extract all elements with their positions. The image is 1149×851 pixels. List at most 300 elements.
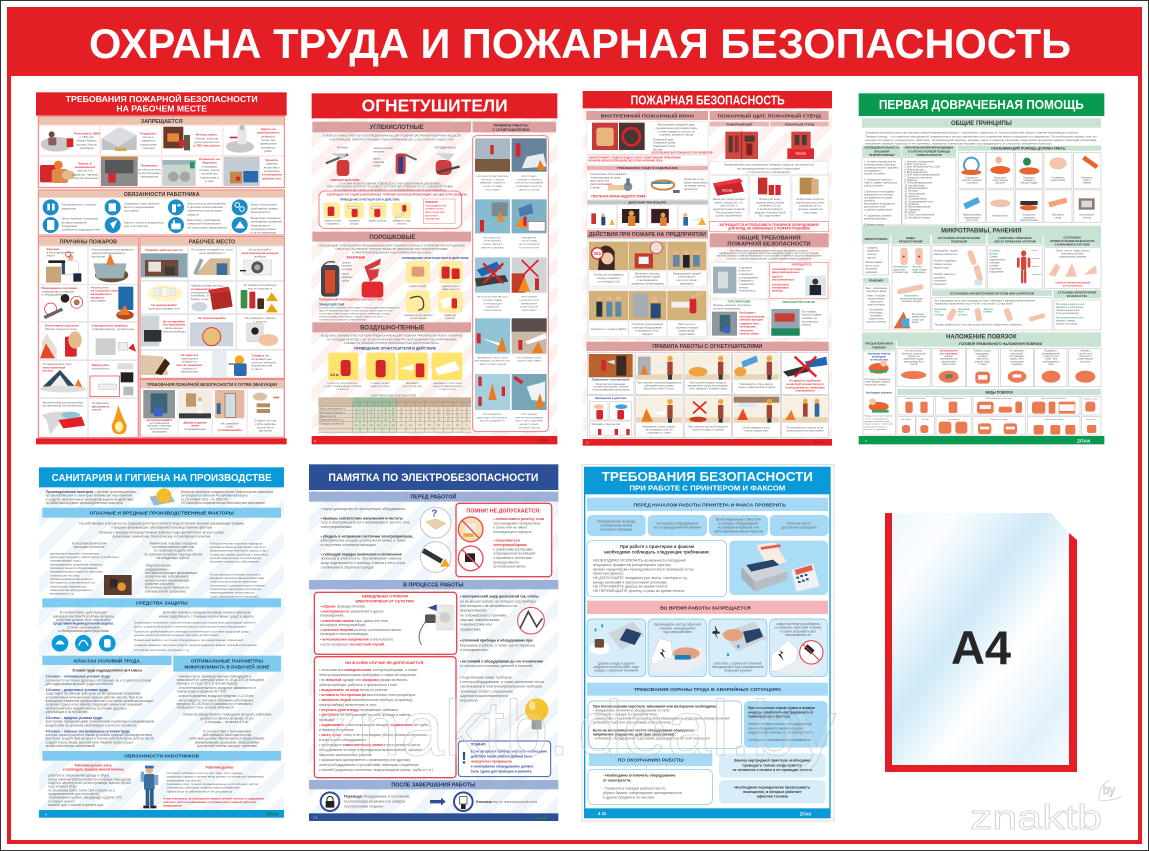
panel: employee duties: Ознакомиться с планом <box>62 203 96 207</box>
section: applying bandages: На стопу <box>1087 419 1096 421</box>
section: check before start: достаточно освещено <box>781 525 817 529</box>
section: general principles: показания к <box>1023 217 1036 219</box>
section: hazardous factors: канцерогенные (вызывающие <box>145 578 189 582</box>
section: general principles: 20. Пинцет <box>904 211 917 214</box>
section: employee duties: принимать пищу только в предназначенных для этой цели местах, <box>167 782 259 786</box>
section: general requirements: ЗАПРЕЩАЕТСЯ: <box>791 264 812 267</box>
section: extinguisher working rules: обморожения <box>795 389 815 393</box>
section: microtraumas and wounds: СГИБАНИЕМ В СУСТАВЕ <box>1055 242 1090 246</box>
section: actions during a fire at the enterprise: охрану и вызвать <box>597 276 621 280</box>
section: hazardous factors: раздражающие; <box>145 567 169 571</box>
panel: workplace: помещении <box>181 356 198 360</box>
warning box: under no circumstances <box>314 657 456 778</box>
section: general principles: Основным условием успеха при оказании первой медицинской помощи – спокойствие, правильность, быстрота действий, знания и умение оказывающего помощь. <box>865 131 1079 135</box>
section: actions during a fire at the enterprise: пожарную сигнализацию <box>631 281 665 285</box>
section: general requirements: загромождать проходы и <box>772 268 804 271</box>
notice box: do not extinguish without oxygen: тушении нельзя <box>425 208 444 211</box>
section: fire board and stand: должна иметь объем <box>756 200 784 204</box>
section: check before start: Вентиляционные отверстия <box>716 517 761 521</box>
section: fire board and stand: Ящик для песка должен <box>713 197 745 201</box>
poster 1 header: НА РАБОЧЕМ МЕСТЕ <box>116 105 208 114</box>
panel: prohibited: Пользовать ЭВМ <box>74 131 100 135</box>
section: general principles: 5. Вата медицинская <box>904 171 928 174</box>
section: powder extinguishers: ПРИНЦИП ДЕЙСТВИЯ <box>319 304 345 307</box>
panel: evacuation routes: легко <box>191 424 199 428</box>
section: general principles: тяжесть травмы, наибольшую <box>864 181 897 184</box>
panel: causes of fires: и оборудования <box>41 293 64 297</box>
section: microtraumas and wounds: Необходимо: поднять <box>934 250 959 253</box>
section: powder extinguishers: нажать на <box>445 315 456 317</box>
table: extinguisher characteristics: 4 <box>438 416 440 418</box>
section: general principles: Определить <box>1022 215 1036 217</box>
section: internal fire hydrant: Внутренний пожарный кран <box>658 123 695 127</box>
panel: evacuation routes: Держите двери <box>183 420 207 424</box>
section: internal fire hydrant: ВОСПОЛЬЗОВАТЬСЯ ЛЮБЫМ ИЗ ЭТИХ ЭЛЕМЕНТОВ <box>651 151 713 154</box>
section: powder extinguishers: ПОЖАРОВ ТВЕРДЫХ МАТЕРИАЛОВ, ГОРЮЧИХ ЖИДКОСТЕЙ, ГАЗОВ <box>319 316 384 319</box>
section: optimal microclimate parameters: пределах 35-100 Вт/м2 в зависимости от величины <box>177 702 253 706</box>
section: work condition classes: установленных гигиенических норм на рабочих местах. При этом <box>46 695 143 699</box>
table: extinguisher characteristics: 5,0 <box>437 409 441 411</box>
poster: electrical safety memo <box>309 464 558 821</box>
section: general principles: 8. Ножницы <box>904 179 918 182</box>
poster 6 footer <box>309 813 558 821</box>
section: general principles: Проводить <box>1023 177 1036 179</box>
section: applying bandages: предметы <box>1012 364 1023 366</box>
section: hazardous factors: материалов и т.д. <box>50 592 75 596</box>
section: general principles: 1. Устранить воздействие на <box>864 160 896 163</box>
section: hazardous factors: повышенная температура <box>50 584 87 588</box>
warning box: disconnect immediately: • появлении запаха гари, дыма или огня <box>320 619 388 623</box>
section: employee duties: предприятия <box>163 804 182 808</box>
section: applying bandages: должна не сдавливать <box>865 429 888 431</box>
section: prohibited during work: мокрыми руками <box>724 669 752 673</box>
section: general principles: 21. Пакет гипотермический <box>904 214 935 217</box>
section: employee duties: в стирку и ремонт; <box>48 799 76 803</box>
panel: employee duties: Курить только в отведенных <box>124 220 164 224</box>
section: general principles: 3. Выполнить необходимые <box>864 190 895 193</box>
section: applying bandages: Спиральная повязка <box>905 398 926 400</box>
section: general principles: Иммобилизовать <box>963 215 982 217</box>
section: work condition classes <box>42 656 172 748</box>
section: during work: от электросети съемных деталей и панелей; <box>460 664 533 668</box>
section: applying bandages: к ране. При <box>1045 359 1058 361</box>
table: extinguisher characteristics: Площадь тушения, м2 <box>320 423 345 425</box>
section: carbon dioxide extinguishers: ПЕРЕДВИЖНЫЕ <box>434 145 456 149</box>
section: microtraumas and wounds: кровь темная, <box>913 269 928 271</box>
section: check before start: На корпусе оборудования <box>656 521 698 525</box>
section: air-foam extinguishers: СОРВАТЬ ПЛОМБУ <box>370 382 391 385</box>
section: applying bandages: необходимо <box>872 356 887 358</box>
panel: workplace: и света <box>252 367 262 371</box>
panel: prohibited <box>38 117 284 188</box>
section: microtraumas and wounds: сохранить <box>934 276 946 279</box>
section: microtraumas and wounds: холод на переносицу <box>1056 313 1080 315</box>
icon: lock <box>321 792 339 811</box>
section: carbon dioxide extinguishers: И МАТЕРИАЛОВ, ЭЛЕКТРОУСТАНОВОК ПОД НАПРЯЖЕНИЕМ ДО 10 КВ, ГОРЮЧИХ ЖИДКОСТЕЙ. <box>329 138 454 142</box>
panel: causes of fires: электрооборудования и <box>92 251 126 255</box>
panel: workplace: у розеток <box>253 319 267 323</box>
section: general principles: 7. Салфетки стерильные <box>904 176 933 179</box>
panel: evacuation routes: устанавливайте <box>218 428 242 432</box>
section: microtraumas and wounds: ОСТАНОВКА КРОВОТЕЧЕНИЯ <box>938 236 980 240</box>
section: extinguisher working rules: Направить струю на очаг <box>591 423 620 426</box>
section: protective equipment: СРЕДСТВА ЗАЩИТЫ <box>136 601 188 607</box>
section: microtraumas and wounds: сонная <box>1031 250 1038 252</box>
panel: extinguisher operating rules: ОТТЕРЕЗАЮЩИЙ <box>483 302 502 305</box>
section: hazardous factors: перенапряжение, монотонность <box>210 591 255 595</box>
section: employee duties: по окончании работ снять СИЗ и убрать их в <box>48 788 115 792</box>
section: protective equipment: В соответствии с действующим <box>60 611 107 615</box>
section: emergency requirements: очередь освободить пострадавшего от <box>748 710 814 714</box>
poster 5 footer: 4 <box>45 812 47 816</box>
section: hazardous factors: микроорганизмы (бактерии, вирусы и др.) <box>210 549 268 553</box>
panel: extinguisher operating rules: НЕ ПРИВОДИТЕ В <box>483 414 502 416</box>
section: microtraumas and wounds: инфекции <box>865 270 878 274</box>
section: work condition classes: которые характеризуются такими уровнями вредных производственных <box>46 733 153 737</box>
panel: extinguisher operating rules: ПРИ ПОЖАРЕ <box>485 188 500 191</box>
section: microtraumas and wounds: покровных тканей <box>867 290 887 293</box>
warning box: disconnect immediately <box>314 592 457 654</box>
table: extinguisher characteristics: 5 <box>447 416 449 418</box>
section: after finishing work: ПО ОКОНЧАНИЮ РАБОТЫ <box>618 758 684 764</box>
panel: employee duties: Выполнять требования <box>187 218 221 222</box>
section: powder extinguishers: сифонная <box>342 276 353 279</box>
section: microtraumas and wounds: опасны для <box>870 302 883 304</box>
table: extinguisher characteristics: 15 <box>437 420 441 422</box>
poster 4 header <box>859 93 1104 116</box>
panel: workplace: Не курите в <box>181 353 198 357</box>
section: employee duties: рабочего места в надлежащем состоянии несет каждый работник <box>163 800 256 804</box>
section: after finishing work: от электросети; <box>603 778 631 782</box>
section: emergency requirements: Оказать первую помощь пострадавшему, <box>748 722 812 726</box>
section: microtraumas and wounds: Венозное <box>913 267 923 269</box>
section: general principles: дыхание и <box>1023 180 1035 182</box>
poster 2 footer: 6 <box>314 439 316 443</box>
table: extinguisher characteristics: ХАРАКТЕРИСТИКИ ОГНЕТУШИТЕЛЕЙ <box>371 395 416 398</box>
section: microtraumas and wounds: Признаки правильности: отсутствие пульса ниже жгута, кровотечение остановлено <box>935 325 1022 327</box>
panel: evacuation routes: открываемыми <box>184 427 206 431</box>
section: actions during a fire at the enterprise: Сообщить о пожаре (МЧС) <box>591 327 627 331</box>
section: microtraumas and wounds: наклонить голову вперед, <box>1056 307 1084 309</box>
poster 4 footer <box>859 436 1104 444</box>
section: applying bandages: повязку, <box>944 356 953 358</box>
section: check before start <box>587 498 829 536</box>
section: applying bandages: сдавливая сосуды, <box>903 359 924 361</box>
section: during work: Администрации/инженерного <box>460 694 508 698</box>
section: extinguisher working rules: Огнетушитель применяют <box>596 383 627 386</box>
section: prohibited during work: производить чистку офисной <box>654 623 701 627</box>
section: general principles: находится рядом и предпринять действия. Оказывающий помощь должен знать основные признаки нарушения жизненно важных функций организма, <box>865 138 1097 142</box>
panel: causes of fires: костер <box>43 369 53 373</box>
info box: attention: и неисправное оборудование должно <box>471 764 533 768</box>
panel: evacuation routes: Не снимайте <box>221 421 239 425</box>
section: internal fire hydrant: Пожарный ствол <box>653 144 675 148</box>
panel: prohibited: территории и <box>200 175 219 179</box>
section: during work: сырыми, заземленными <box>460 618 499 622</box>
warning box: under no circumstances: • производить самостоятельно ремонт электрической части <box>319 743 420 747</box>
section: microtraumas and wounds: равномерно <box>913 272 926 274</box>
section: work condition classes: работающих и их потомство <box>46 710 88 714</box>
section: powder extinguishers: направить струю порошка <box>404 315 433 317</box>
section: general principles: восстановить проходимость <box>864 202 896 205</box>
section: general principles: 12. Валидол <box>904 190 919 193</box>
section: general principles: 6. Жгут кровоостанавливающий <box>904 174 940 177</box>
section: general principles: 11. Раствор аммиака <box>904 187 928 190</box>
warning box: under no circumstances: • пользоваться самодельными электроприборами, а также <box>319 668 417 672</box>
section: during work: • подключение новых приборов <box>460 675 512 679</box>
section: before work: шнур подключается к прибору, а затем к сети, а при <box>321 561 405 565</box>
panel: workplace <box>140 237 284 378</box>
table: extinguisher characteristics: 2 <box>356 416 358 418</box>
section: general principles: пострадавшего; <box>864 169 882 172</box>
section: actions during a fire at the enterprise <box>587 230 708 339</box>
poster: first aid <box>859 93 1104 444</box>
panel: causes of fires: свечей <box>92 408 102 412</box>
section: general requirements: использовать <box>772 283 790 286</box>
panel: extinguisher operating rules: НЕ ПОДНОСИТЬ <box>484 237 502 239</box>
poster: fire extinguishers <box>312 93 557 444</box>
poster 1 header <box>36 92 287 116</box>
section: hazardous factors: психические перегрузки (умственное <box>210 587 262 591</box>
section: actions during a fire at the enterprise: место по плану <box>676 278 697 282</box>
warning box: under no circumstances: • заполнять водой нагревательные приборы (к примеру <box>319 698 412 702</box>
section: microtraumas and wounds: сильная струя <box>893 272 909 274</box>
section: fire board and stand: Предназначены для размещения пожарных средств, инструментов, <box>724 163 814 167</box>
panel: causes of fires: приборов <box>92 254 106 258</box>
section: microtraumas and wounds: Раны с большим <box>867 296 886 298</box>
section: optimal microclimate parameters: а площадь – не менее 4,5 м2 <box>205 720 249 724</box>
poster 5 header <box>39 467 284 487</box>
panel: extinguisher operating rules: ЗАГОРЕВШЕЙСЯ ПОВЕРХНОСТИ, <box>474 360 511 363</box>
table: extinguisher characteristics: 20 <box>370 420 373 422</box>
section: during work: или аппараты, не натягивался и не <box>460 604 517 608</box>
panel: prohibited: территорию <box>140 142 157 146</box>
poster 4 footer: ZПАК <box>1077 438 1091 444</box>
panel: extinguisher operating rules: ТУШИТЕ СНИЗУ ВВЕРХ <box>517 361 542 363</box>
warning box: disconnect immediately: • если произошел несчастный случай. <box>320 642 385 646</box>
section: applying bandages: чистой <box>910 363 918 366</box>
section: microtraumas and wounds: Закрутка <box>984 309 994 311</box>
section: general requirements: ПОЖАРНОЙ БЕЗОПАСНОСТИ <box>727 239 811 247</box>
section: extinguisher working rules: и использованием огнетушителя <box>592 388 630 391</box>
section: after work: исключающее возможность запуска <box>344 800 406 804</box>
panel: extinguisher operating rules: ПРИ ТУШЕНИИ <box>521 297 537 299</box>
section: hazardous factors: развитие опухолей); <box>145 582 175 586</box>
section: applying bandages: водой, снять <box>1010 358 1025 361</box>
warning box: remember not allowed: провода вместо <box>493 560 519 564</box>
panel: prohibited: на обогрев печи <box>138 167 161 171</box>
warning box: under no circumstances: • опускать руки в воду нагреваемую чайником; <box>319 708 399 712</box>
section: extinguisher working rules: Применение огнетушителей <box>592 378 630 382</box>
poster 7 footer: ZПАК <box>800 811 812 816</box>
section: general requirements: Содержать <box>739 265 753 269</box>
section: actions during a fire at the enterprise: тушению пожара <box>675 325 698 329</box>
section: microtraumas and wounds: положение <box>934 280 947 283</box>
table: extinguisher characteristics: 8,5 <box>437 412 441 414</box>
section: fire board and stand: иметь объем 0,5; 1,0 <box>715 200 743 204</box>
section: hazardous factors: физические, химические, биологические и психофизиологические <box>113 534 211 538</box>
table: extinguisher characteristics: 10 <box>465 409 469 411</box>
section: applying bandages: На лоб <box>922 419 930 421</box>
section: prohibited during work: неисправные ее <box>785 633 811 637</box>
table: extinguisher characteristics: 10 <box>419 420 422 422</box>
section: hazardous factors: передвигающиеся изделия, заготовки; <box>50 570 103 574</box>
section: actions during a fire at the enterprise: Эвакуировать людей <box>673 271 701 275</box>
section: hazardous factors: производственным факторам относятся <box>210 545 266 549</box>
section: general requirements: и оборудование <box>739 275 759 279</box>
section: microtraumas and wounds: КРОВОТЕЧЕНИЙ <box>899 240 922 244</box>
section: prohibited during work: и собирать офисную технику <box>775 626 822 630</box>
poster 3 header: ПОЖАРНАЯ БЕЗОПАСНОСТЬ <box>631 93 785 107</box>
panel: workplace: контейнер, а <box>191 294 209 298</box>
section: microtraumas and wounds: МИКРОТРАВМЫ, РАНЕНИЯ <box>941 228 1022 234</box>
section: general principles: 9. Перчатки медицинские <box>904 182 933 185</box>
section: microtraumas and wounds: Наложение <box>958 309 971 311</box>
requirements box: инородных предметов (канцелярских скрепок, <box>593 563 671 567</box>
section: applying bandages: накладывать <box>975 353 990 355</box>
section: carbon dioxide extinguishers: механизм <box>373 152 384 154</box>
panel: extinguisher operating rules: ОБЕСТОЧИТЬ И ДЕРЖАТЬ <box>515 420 544 423</box>
section: applying bandages: Повязка на голову <box>1044 419 1064 421</box>
poster: sanitation and hygiene at work <box>39 467 284 818</box>
section: actions during a fire at the enterprise: средствами <box>679 332 695 336</box>
panel: causes of fires: брошенных <box>92 404 110 408</box>
section: general principles: оказания первой помощи и ее приемы, правила транспортировки пострадавшего и способы оказания помощи. <box>865 142 1052 146</box>
section: actions during a fire at the enterprise: эвакуации <box>680 281 694 285</box>
section: hazardous factors: ОПАСНЫЕ И ВРЕДНЫЕ ПРОИЗВОДСТВЕННЫЕ ФАКТОРЫ <box>90 511 234 517</box>
panel: causes of fires: Самодельные приборы <box>92 324 128 328</box>
table: extinguisher characteristics: 2 <box>466 425 468 427</box>
warning box: remember not allowed: • пользоваться <box>493 539 520 543</box>
section: applying bandages: загрязненные <box>941 361 957 363</box>
section: extinguisher working rules: огнетушителя во избежание <box>785 385 825 389</box>
section: fire board and stand: ПЕСОК <box>722 189 733 193</box>
carbon dioxide extinguisher drawings <box>325 153 460 176</box>
section: after finishing work <box>588 753 826 804</box>
section: check before start: Рабочее место <box>787 521 811 525</box>
section: microtraumas and wounds: МИКРОТРАВМЫ <box>865 237 888 241</box>
panel: evacuation routes: ТРЕБОВАНИЯ ПОЖАРНОЙ БЕЗОПАСНОСТИ К ПУТЯМ ЭВАКУАЦИИ <box>147 380 278 387</box>
section: powder extinguishers: ЗАКАЧНЫЕ <box>346 255 366 259</box>
panel: causes of fires: Оставленный в лесу <box>43 362 72 366</box>
section: before work: ПЕРЕД РАБОТОЙ <box>410 493 456 501</box>
section: general principles: наличие сознания <box>962 180 983 182</box>
panel: evacuation routes: места были <box>257 425 274 429</box>
table: extinguisher characteristics: 3 <box>401 416 403 418</box>
section: microtraumas and wounds: При кровотечении из уха: <box>1056 318 1084 320</box>
section: general requirements: безопасности <box>739 289 756 293</box>
panel: causes of fires: Размещение <box>91 285 109 289</box>
section: powder extinguishers: И ЭЛЕКТРООБОРУДОВАНИЯ ПОД НАПРЯЖЕНИЕМ ДО 1000 В <box>352 250 432 254</box>
section: fire board and stand: на производственных и складских территориях, <box>737 166 801 170</box>
section: powder extinguishers: ПОРОШКОВЫЕ ОГНЕТУШИТЕЛИ ПРЕДНАЗНАЧЕНЫ ДЛЯ ТУШЕНИЯ ПОЖАРОВ И ЗАГОРАНИЙ ПРИ БУРОДОБЫЧЕ <box>318 244 465 248</box>
table: extinguisher characteristics: 4 <box>385 416 387 418</box>
panel: evacuation routes <box>140 379 284 438</box>
section: fire board and stand: Песок должен быть <box>716 210 742 214</box>
section: general principles: Наложить жгут <box>992 216 1009 218</box>
section: applying bandages: Повязку следует <box>973 351 992 353</box>
section: before work: электроприемника; <box>321 525 352 529</box>
warning box: disconnect immediately: проводов и электроприводов; <box>320 632 369 636</box>
section: fire board and stand: должны храниться <box>798 207 823 211</box>
section: microtraumas and wounds: закрыть рану <box>934 266 950 269</box>
section: general requirements: неисправные <box>772 286 789 289</box>
section: general principles: Первая помощь – это комплекс мероприятий, направленных на восстановление или сохранение жизни и здоровья пострадавшего. Ее необходимо оказать тем, кто <box>865 134 1098 138</box>
notice box: do not extinguish without oxygen: ПРИВЕДЕНИЕ ОГНЕТУШИТЕЛЯ В ДЕЙСТВИЕ: <box>340 197 400 201</box>
section: fire board and stand: укомплектован лопатой <box>713 207 745 211</box>
warning box: under no circumstances: патронов, штепсельных розеток; <box>319 753 372 757</box>
warning box: remember not allowed <box>456 503 552 577</box>
panel: causes of fires: ПРИЧИНЫ ПОЖАРОВ <box>60 239 117 245</box>
section: protective equipment: работники должны быть обеспечены <box>56 618 111 622</box>
section: before work: приборов в электросеть. При включении сначала <box>321 557 401 561</box>
panel: causes of fires: при сварке <box>91 299 106 303</box>
section: applying bandages: Восьмиобразная повязка <box>986 398 1012 400</box>
section: applying bandages <box>862 332 1101 435</box>
section: general principles: дыхание <box>996 183 1006 185</box>
warning box: under no circumstances: электроприборы, работать и прикасаться к ним; <box>319 683 398 687</box>
section: extinguisher working rules: тушить сверху вниз <box>744 429 769 432</box>
panel: prohibited: бензин, керосин <box>195 136 218 140</box>
poster 3 header <box>583 91 832 108</box>
section: general principles: 13. Нитроглицерин <box>904 192 926 195</box>
section: emergency requirements: травмирующего фактора. <box>748 715 791 719</box>
section: fire board and stand: не менее 0,2 м3 <box>759 204 781 208</box>
section: after work <box>309 780 558 811</box>
warning box: remember not allowed: штепсельных вилок. <box>493 565 527 569</box>
table: extinguisher characteristics: 1,0 <box>400 409 404 411</box>
section: work condition classes: КЛАССЫ УСЛОВИЙ ТРУДА <box>74 656 140 664</box>
panel: prohibited: местах и в <box>78 169 93 173</box>
section: after finishing work: проводить только когда принтер <box>742 763 803 767</box>
panel: prohibited: подвалах, гаражах <box>72 172 99 176</box>
section: applying bandages: туго затягивать <box>940 353 958 355</box>
panel: employee duties: средств <box>187 212 199 216</box>
section: microtraumas and wounds: причиной <box>865 267 878 271</box>
section: internal fire hydrant: проверить <box>684 187 698 191</box>
panel: workplace: электронагревательные <box>242 251 279 255</box>
section: extinguisher working rules: Направляйте струю сверху, <box>739 382 774 386</box>
table: extinguisher characteristics: 8,0 <box>446 409 450 411</box>
panel: prohibited: малярных <box>261 145 276 149</box>
section: work condition classes: создает угрозу жизни, высокий риск тяжелых форм острых <box>46 740 133 744</box>
panel: employee duties: безопасности <box>251 210 270 214</box>
section: applying bandages: Не допускается <box>940 351 958 353</box>
section: microtraumas and wounds: - ссадины, <box>865 246 878 249</box>
section: microtraumas and wounds: ОСТАНОВКА КРОВОТЕЧЕНИЯ ЖГУТОМ ИЛИ ЗАКРУТКОЙ <box>950 291 1034 295</box>
panel: evacuation routes: проходы и выходы <box>147 424 172 428</box>
intro text with icon: «О санитарно-эпидемическом благополучии населения» <box>181 501 266 505</box>
section: microtraumas and wounds: на плечо <box>958 314 968 316</box>
section: general principles: угрозу для жизни <box>864 184 884 187</box>
section: air-foam extinguishers: 3-6 м <box>330 373 339 377</box>
table: extinguisher characteristics: 10 <box>409 420 413 422</box>
table: extinguisher characteristics: 0,1 <box>400 425 404 427</box>
notice box: do not extinguish without oxygen: нажать на рычаг <box>369 221 387 223</box>
requirements box: НЕ ОТКРЫВАЙТЕ дверцы во время печати; <box>593 585 668 589</box>
section: during work: к электрооборудованию, а также увеличение числа <box>460 680 544 684</box>
poster 1 footer <box>36 438 287 444</box>
section: employee duties: помещениях или местах; <box>167 778 202 782</box>
main title: ОХРАНА ТРУДА И ПОЖАРНАЯ БЕЗОПАСНОСТЬ <box>89 20 1071 67</box>
section: fire board and stand: ПОЖАРНЫЙ СТЕНД <box>785 122 815 126</box>
table: extinguisher characteristics: 2,0 <box>384 425 388 427</box>
section: general principles: Приложить <box>1052 215 1065 217</box>
section: during work: светильников и электронагревательных приборов <box>460 685 542 689</box>
section: extinguisher working rules: При тушении пролитой жидкости <box>688 424 729 428</box>
section: general principles: мероприятия по спасению <box>864 193 893 196</box>
warning box: under no circumstances: и батареи отопления; <box>319 728 354 732</box>
